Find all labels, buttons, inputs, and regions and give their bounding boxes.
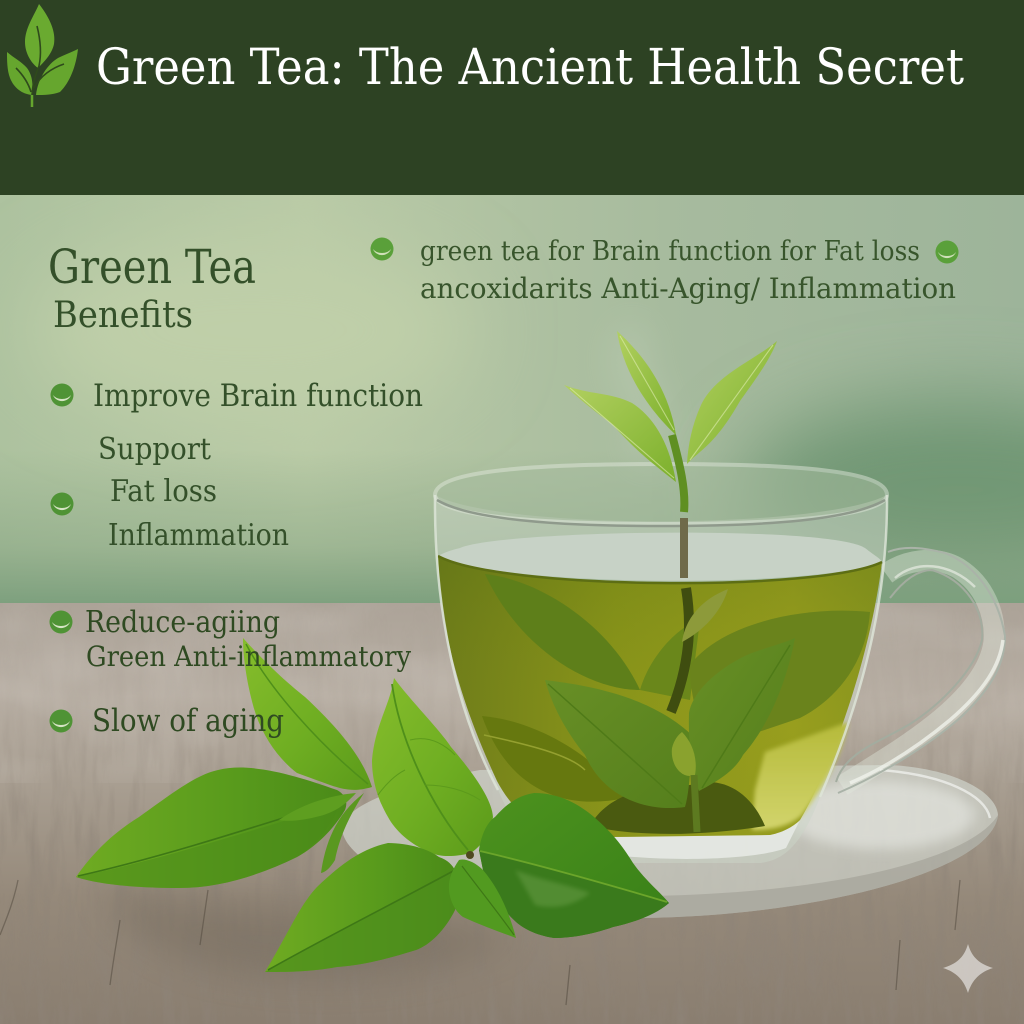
tea — [438, 556, 882, 837]
submerged stem — [671, 588, 689, 712]
icon: bullet 2 — [50, 492, 74, 516]
leaf: upper left — [243, 638, 372, 790]
icon: tea leaf logo — [7, 4, 78, 107]
heading: Green Tea Benefits — [48, 240, 256, 336]
text: support fat loss inflammation: Support — [98, 432, 211, 467]
background: wooden table — [0, 603, 1024, 1024]
sprout above cup — [564, 331, 777, 578]
fresh tea leaves on table — [76, 638, 669, 980]
leaf: small center — [449, 859, 516, 938]
text: slow of aging: Slow of aging — [92, 703, 284, 739]
text: reduce aging: Green Anti-inflammatory — [86, 640, 411, 673]
text: support fat loss inflammation — [98, 432, 289, 553]
leaf: bottom — [265, 843, 457, 972]
cup rim — [435, 464, 887, 524]
icon: top left bullet — [370, 238, 394, 260]
submerged leaves — [545, 638, 795, 832]
icon: sparkle watermark — [943, 944, 993, 993]
saucer — [342, 765, 998, 918]
cup base — [545, 820, 800, 859]
text: reduce aging: Reduce-agiing — [85, 605, 280, 640]
leaf: far left — [76, 768, 346, 888]
heading: Green Tea Benefits: Benefits — [53, 295, 193, 336]
leaf: thin twigs — [279, 793, 364, 873]
icon: bullet 4 — [50, 710, 72, 732]
text: top summary lines: green tea for Brain function for Fat loss — [420, 236, 920, 267]
cup body — [435, 495, 887, 863]
text: brain function: Improve Brain function — [93, 378, 423, 414]
background: blurred green backdrop — [0, 190, 1024, 610]
cup handle — [836, 548, 1005, 793]
glass cup with tea — [435, 464, 887, 863]
top callout: benefit summary — [370, 236, 958, 305]
list: benefits — [50, 378, 423, 739]
submerged dark leaves — [482, 574, 870, 834]
text: support fat loss inflammation: Inflammation — [108, 518, 289, 553]
text: top summary lines — [420, 236, 956, 305]
light tea area — [752, 722, 848, 830]
icon: bullet 3 — [50, 610, 72, 634]
text: reduce aging — [85, 605, 411, 673]
text: top summary lines: ancoxidarits Anti-Aging/ Inflammation — [420, 272, 956, 305]
text: support fat loss inflammation: Fat loss — [110, 474, 217, 509]
icon: top right bullet — [936, 240, 958, 264]
tea surface — [438, 533, 882, 581]
leaf: right large — [479, 793, 669, 938]
icon: bullet 1 — [50, 384, 74, 406]
steam — [628, 330, 652, 460]
heading: Green Tea Benefits: Green Tea — [48, 240, 256, 295]
leaf: center — [372, 678, 493, 856]
header band — [0, 0, 1024, 195]
